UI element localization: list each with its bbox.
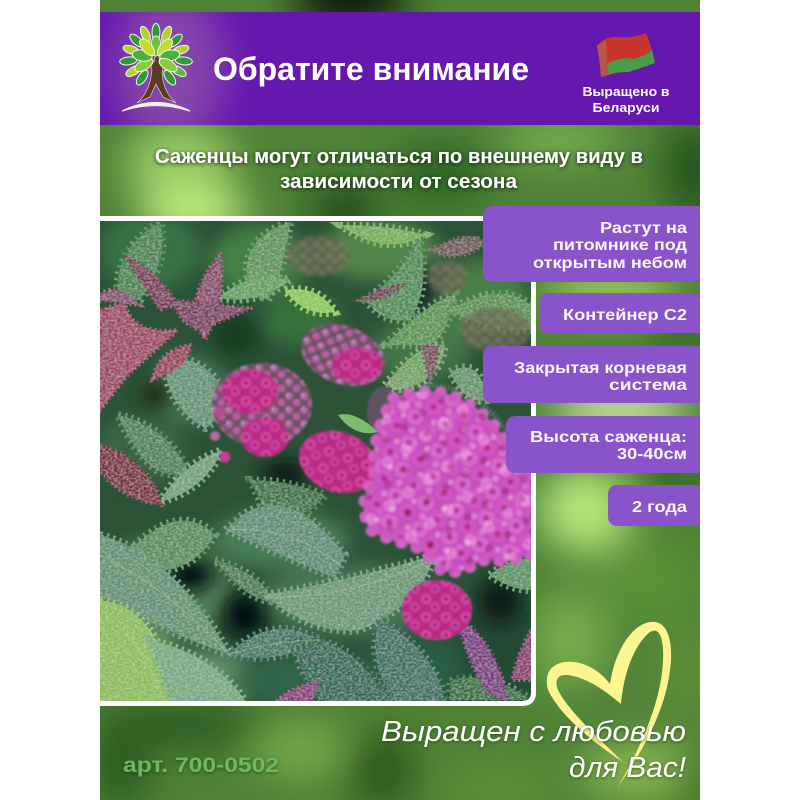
slogan: для Вас! — [569, 752, 686, 784]
pill: container — [539, 293, 700, 333]
pill: height — [506, 416, 700, 473]
pill: height: Высота саженца: — [530, 429, 687, 446]
slogan: Выращен с любовью — [381, 716, 686, 748]
pill: open air: питомнике под — [553, 237, 687, 254]
purple leaves — [100, 236, 531, 701]
pill: age — [608, 485, 700, 526]
pills — [483, 206, 700, 526]
pill: open air: Растут на — [600, 220, 687, 237]
photo underpainting — [100, 221, 531, 701]
pill: root system: система — [609, 377, 687, 394]
flag caption: Выращено в — [582, 84, 670, 99]
photo frame — [100, 216, 536, 706]
flag caption — [582, 84, 670, 115]
photo: spirea plant — [100, 221, 531, 701]
slogan — [381, 716, 686, 784]
green leaves — [100, 222, 531, 701]
subtitle: зависимости от сезона — [280, 171, 518, 193]
pill: open air: открытым небом — [533, 255, 687, 272]
subtitle — [155, 146, 643, 193]
dried flower heads — [286, 236, 531, 352]
pill: open air — [483, 206, 700, 282]
title: Обратите внимание — [213, 51, 529, 87]
icon: Belarus flag — [597, 33, 655, 77]
pill: container: Контейнер С2 — [563, 307, 687, 324]
logo: tree — [119, 24, 193, 111]
pill: age: 2 года — [632, 499, 687, 516]
subtitle: Саженцы могут отличаться по внешнему виду в — [155, 146, 643, 168]
photo shadows — [141, 268, 522, 637]
blurred green background — [90, 0, 725, 800]
icon: heart — [547, 622, 671, 788]
pill: root system: Закрытая корневая — [514, 360, 687, 377]
leaf midribs — [100, 529, 435, 701]
flower clusters — [210, 313, 531, 640]
foreground leaf over cluster — [338, 414, 378, 433]
pill: height: 30-40см — [617, 446, 687, 463]
header band — [100, 12, 700, 125]
pill: root system — [483, 346, 700, 403]
article number: арт. 700-0502 — [123, 754, 279, 777]
flag caption: Беларуси — [592, 100, 660, 115]
